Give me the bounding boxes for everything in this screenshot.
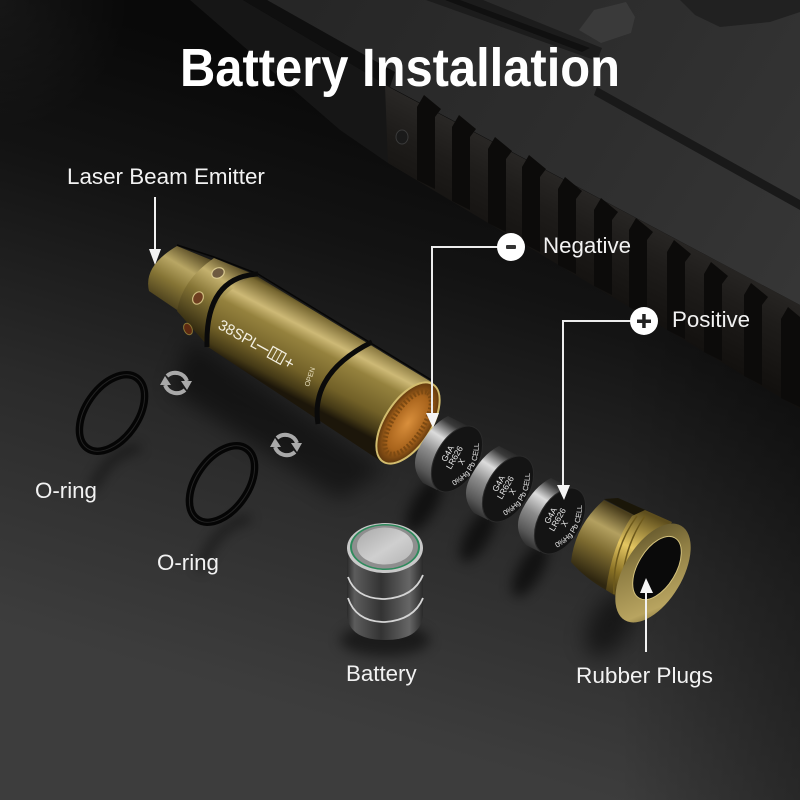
label: positive: Positive xyxy=(672,307,750,332)
battery 3 xyxy=(518,478,585,554)
arrow: negative connector xyxy=(426,247,500,428)
battery 3: LR626 xyxy=(547,506,568,533)
collar with holes xyxy=(177,258,258,345)
laser bullet cartridge xyxy=(148,245,452,474)
spare battery stack xyxy=(340,523,430,656)
O-ring left xyxy=(66,363,158,463)
battery 1 xyxy=(415,416,482,492)
label: battery: Battery xyxy=(346,661,417,686)
battery 1: LR626 xyxy=(444,444,465,471)
main tube xyxy=(205,275,433,462)
icon: negative xyxy=(497,233,525,261)
O-ring seat 1 xyxy=(207,274,258,347)
battery 2: X xyxy=(507,486,518,496)
tip section xyxy=(148,246,216,312)
arrow: laser beam emitter xyxy=(149,197,161,265)
engraving: model: + xyxy=(280,352,298,374)
battery 3: 0%Hg Pb CELL xyxy=(555,505,582,548)
icon: replace right xyxy=(270,435,302,455)
engraving: open: OPEN xyxy=(304,367,317,388)
shadows under parts xyxy=(92,340,645,665)
engraving: model: 38SPL xyxy=(215,317,263,353)
battery 2: LR626 xyxy=(495,474,516,501)
O-ring right xyxy=(176,434,268,534)
battery 2: 0%Hg Pb CELL xyxy=(503,473,530,516)
top edge line xyxy=(177,245,433,381)
arrow: positive connector xyxy=(557,321,632,500)
label: laser beam emitter: Laser Beam Emitter xyxy=(67,164,265,189)
icon: replace left xyxy=(160,373,192,393)
battery 1: X xyxy=(456,456,467,466)
arrow: rubber plugs xyxy=(640,578,653,652)
label: O-ring left: O-ring xyxy=(35,478,97,503)
label: negative: Negative xyxy=(543,233,631,258)
title: Battery Installation xyxy=(180,38,620,98)
battery 2 xyxy=(466,446,533,522)
battery 1: 0%Hg Pb CELL xyxy=(452,443,479,486)
battery 1: G4A xyxy=(439,443,456,463)
battery 3: X xyxy=(559,518,570,528)
rifle in background xyxy=(190,0,800,409)
rubber plug cap xyxy=(571,498,706,635)
battery 2: G4A xyxy=(490,473,507,493)
O-ring seat 2 xyxy=(317,342,372,424)
label: O-ring right: O-ring xyxy=(157,550,219,575)
open end of tube xyxy=(364,372,452,474)
label: rubber plugs: Rubber Plugs xyxy=(576,663,713,688)
icon: positive xyxy=(630,307,658,335)
engraving: model xyxy=(215,316,298,374)
battery 3: G4A xyxy=(542,505,559,525)
